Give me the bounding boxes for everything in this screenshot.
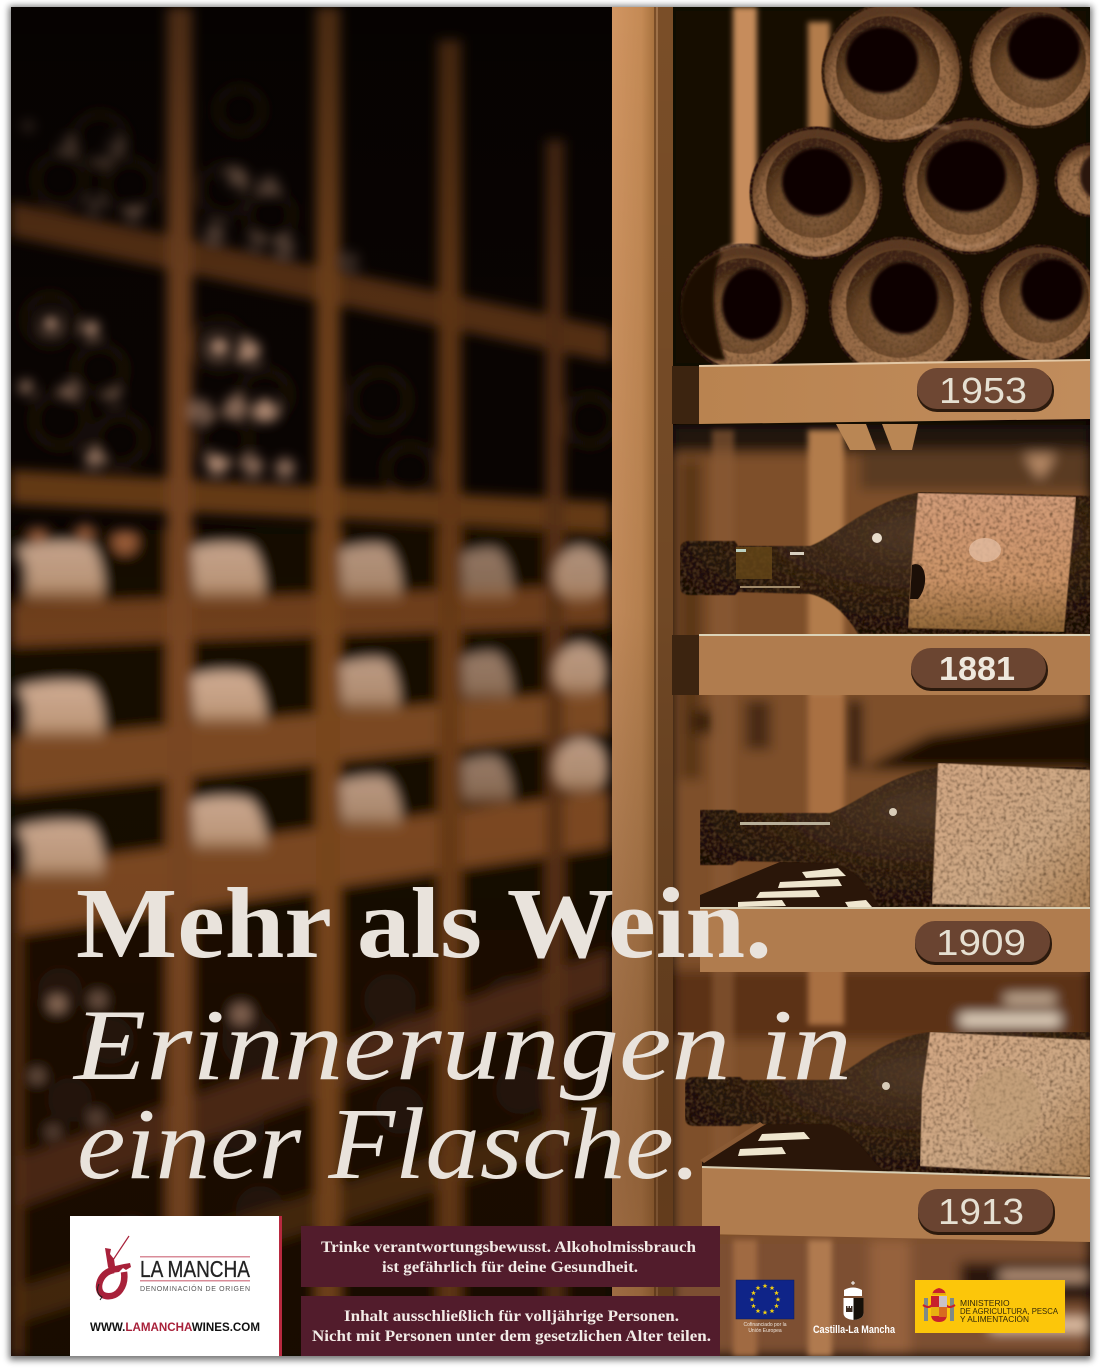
subtitle line 2: einer Flasche. <box>77 1088 701 1201</box>
shelf 1909 <box>700 907 1090 972</box>
tag 1881: 1881 <box>939 650 1015 687</box>
tag 1909: 1909 <box>936 922 1026 963</box>
title: Mehr als Wein.: Mehr als Wein. <box>76 867 772 979</box>
bottle with label, middle <box>700 763 1090 908</box>
icon: rider on horse emblem <box>98 1236 131 1300</box>
tag 1913: 1913 <box>938 1191 1024 1232</box>
logo: Spanish ministry: DE AGRICULTURA, PESCA <box>960 1306 1058 1316</box>
tag 1913 <box>918 1189 1055 1235</box>
dark rack under lower bottle <box>702 1124 885 1172</box>
rack slats, lower <box>700 1122 810 1163</box>
panel: responsible drinking notice <box>301 1226 720 1287</box>
logo: European Union: Unión Europea <box>748 1328 782 1334</box>
throats <box>696 12 1089 358</box>
vertical posts <box>167 7 192 1356</box>
logo: Spanish ministry <box>915 1280 1065 1333</box>
tag 1909 <box>915 921 1052 965</box>
logo: Spanish ministry: MINISTERIO <box>960 1298 1010 1308</box>
vertical darkening of the cellar <box>11 7 611 1356</box>
background posts on the right <box>712 7 844 1356</box>
panel: responsible drinking notice: Trinke verantwortungsbewusst. Alkoholmissbrauch <box>321 1239 696 1256</box>
stacked old bottle necks <box>680 1 1100 378</box>
tag 1953: 1953 <box>939 370 1027 411</box>
dark bottle holes <box>680 16 1100 360</box>
shelf 1953 <box>672 359 1090 450</box>
bokeh highlights <box>19 120 359 1139</box>
blurred cellar racks on the left <box>9 7 614 1360</box>
panel: responsible drinking notice: ist gefährlich für deine Gesundheit. <box>382 1259 638 1276</box>
website: WWW.LAMANCHAWINES.COM <box>90 1322 260 1334</box>
background behind the right rack <box>672 7 1090 1356</box>
rack slats, middle <box>738 868 872 907</box>
logo: Castilla-La Mancha <box>813 1281 896 1336</box>
panel: adults only notice <box>301 1296 720 1356</box>
logo wordmark: LA MANCHA <box>140 1256 251 1282</box>
logo: European Union: Cofinanciado por la <box>743 1322 787 1328</box>
lower bottle field <box>30 968 550 1216</box>
logo: European Union <box>736 1280 794 1334</box>
icon: crest <box>844 1281 864 1320</box>
logo: Spanish ministry: Y ALIMENTACIÓN <box>960 1314 1029 1324</box>
faint bottle shapes, upper <box>26 88 614 494</box>
dark rack under middle bottle <box>700 862 900 908</box>
logo tagline: DENOMINACIÓN DE ORIGEN <box>140 1284 250 1293</box>
icon: EU stars <box>750 1283 780 1315</box>
logo lines <box>140 1256 250 1258</box>
panel: La Mancha logo <box>70 1216 282 1356</box>
tag 1953 <box>917 368 1054 412</box>
shelves <box>11 202 610 362</box>
large foreground post <box>612 7 673 1356</box>
bottle with label, lower <box>685 1032 1090 1176</box>
logo: Castilla-La Mancha: Castilla-La Mancha <box>813 1324 896 1336</box>
bottle rims <box>681 1 1100 378</box>
pale bottle labels <box>18 542 607 882</box>
subtitle line 1: Erinnerungen in <box>72 989 852 1102</box>
rim highlights <box>720 126 997 254</box>
bottle with label, upper <box>680 492 1092 634</box>
panel: adults only notice: Nicht mit Personen unter dem gesetzlichen Alter teilen. <box>312 1328 711 1345</box>
headline <box>72 867 852 1201</box>
shelf 1913 <box>702 1166 1090 1242</box>
tag 1881 <box>911 648 1048 691</box>
panel: adults only notice: Inhalt ausschließlich für volljährige Personen. <box>344 1308 679 1325</box>
icon: coat of arms <box>923 1288 955 1322</box>
shelf 1881 <box>672 634 1090 695</box>
